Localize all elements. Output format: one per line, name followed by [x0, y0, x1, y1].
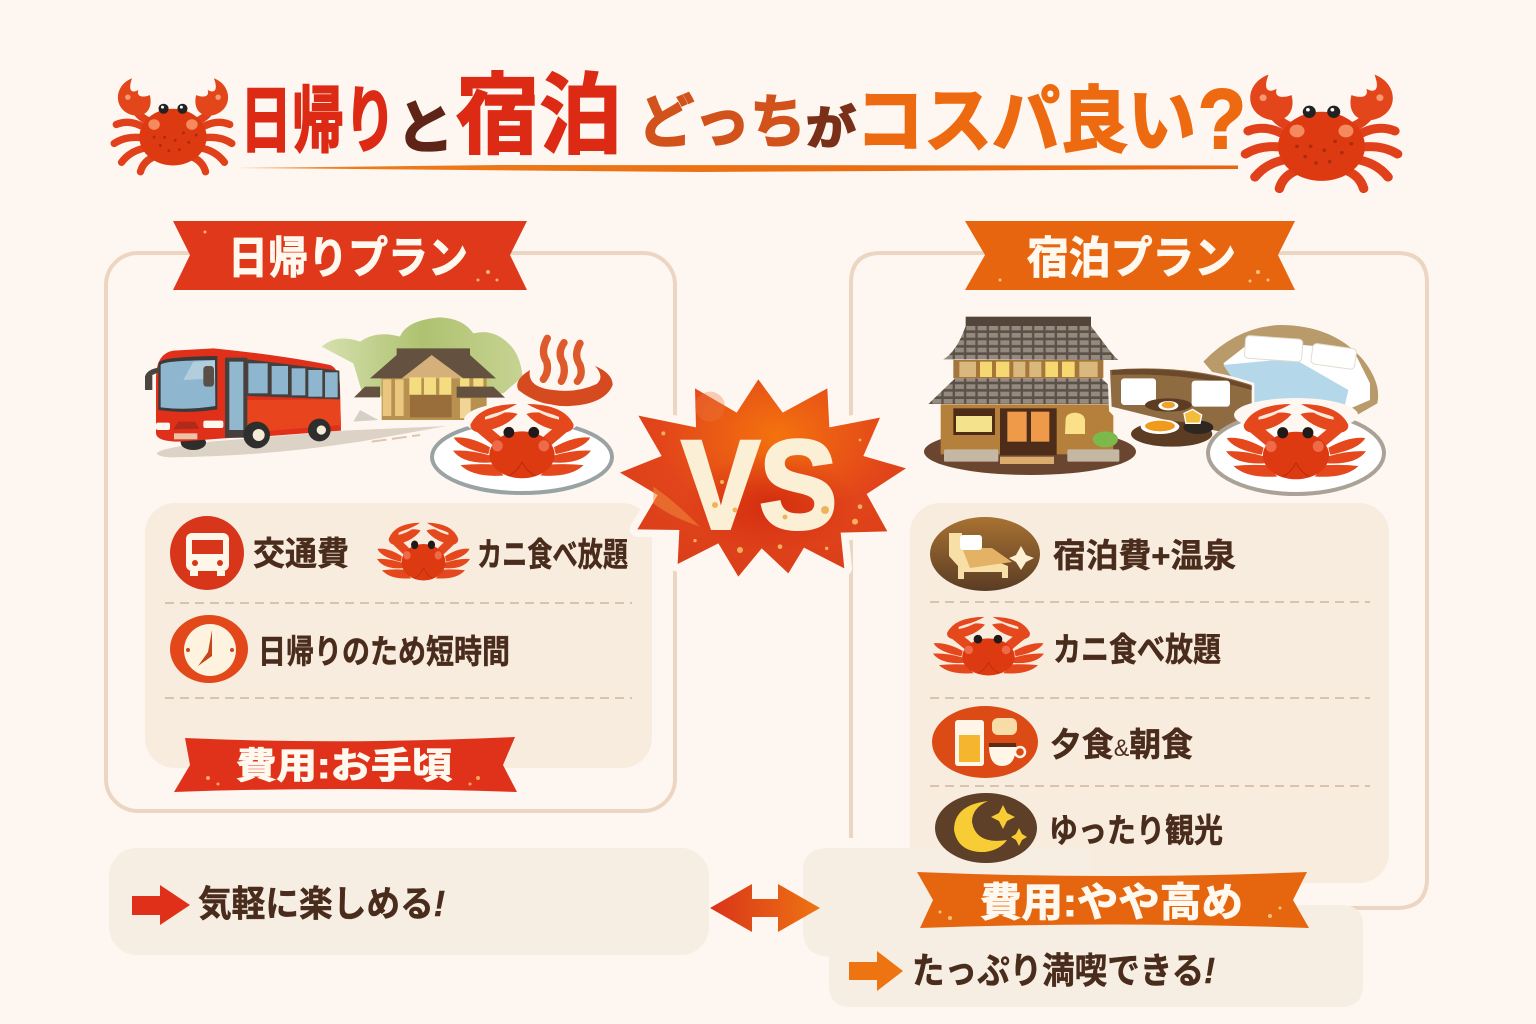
ribbon: cost somewhat high: 費用:やや高め [980, 881, 1243, 925]
icon: crab [933, 617, 1044, 675]
callout: enjoy fully: たっぷり満喫できる! [912, 950, 1215, 991]
illustration: bed and dining room [1110, 325, 1378, 447]
text: dinner and breakfast: 夕食&朝食 [1050, 726, 1193, 763]
ribbon: overnight plan: 宿泊プラン [1027, 234, 1236, 283]
ribbon: cost somewhat high [917, 872, 1309, 928]
panel: overnight [851, 253, 1427, 908]
text: all you can eat: カニ食べ放題 [477, 536, 628, 573]
icon: drink and coffee [932, 706, 1038, 778]
text: relaxed sightseeing: ゆったり観光 [1049, 812, 1223, 849]
illustration: crab plate (overnight) [1208, 398, 1384, 494]
panel outline [851, 253, 1427, 908]
title text: と: と [396, 96, 454, 161]
icon: bus [170, 516, 244, 590]
illustration: crab plate (day trip) [432, 402, 612, 493]
callout: easy to enjoy: 気軽に楽しめる! [198, 883, 445, 924]
illustration: ryokan building [924, 317, 1136, 475]
title [114, 66, 1398, 189]
icon: bed [930, 517, 1040, 591]
list: day trip items [165, 516, 632, 698]
inner list background [145, 503, 652, 768]
icon: crab [377, 523, 470, 580]
title underline [235, 165, 1238, 172]
icon: crab left of title [114, 78, 232, 172]
illustration: bus [145, 348, 447, 457]
arrow: orange [849, 951, 903, 991]
callout background: overnight [803, 848, 1363, 1007]
panel: day trip [106, 253, 675, 811]
ribbon: overnight plan [965, 221, 1295, 290]
text: lodging and onsen: 宿泊費+温泉 [1053, 537, 1236, 574]
callout background: day trip [109, 848, 709, 955]
ribbon: day trip plan: 日帰りプラン [228, 234, 468, 283]
icon: crab right of title [1245, 75, 1398, 189]
arrow: red [132, 885, 190, 925]
illustration: ryokan with trees [322, 317, 523, 422]
icon: moon [935, 793, 1037, 863]
ribbon: cost affordable [174, 737, 517, 792]
panel outline [106, 253, 675, 811]
title text: question mark: ? [1198, 72, 1246, 166]
VS text: VS [682, 416, 837, 555]
icon: onsen symbol [517, 338, 613, 406]
title text: コスパ良い: コスパ良い [856, 82, 1196, 162]
ribbon: cost affordable: 費用:お手頃 [236, 745, 452, 786]
VS starburst [620, 379, 906, 577]
inner list background [910, 503, 1389, 883]
title text: 日帰り: 日帰り [240, 82, 396, 162]
title text: どっち: どっち [638, 90, 806, 155]
icon: clock [170, 615, 248, 683]
text: transport: 交通費 [253, 535, 349, 572]
text: all you can eat: カニ食べ放題 [1053, 631, 1221, 668]
title text: が: が [806, 102, 856, 154]
title text: 宿泊: 宿泊 [456, 66, 622, 165]
ribbon: day trip plan [173, 221, 527, 290]
list: overnight items [930, 517, 1370, 863]
text: short time: 日帰りのため短時間 [258, 633, 510, 670]
double arrow [710, 884, 820, 932]
